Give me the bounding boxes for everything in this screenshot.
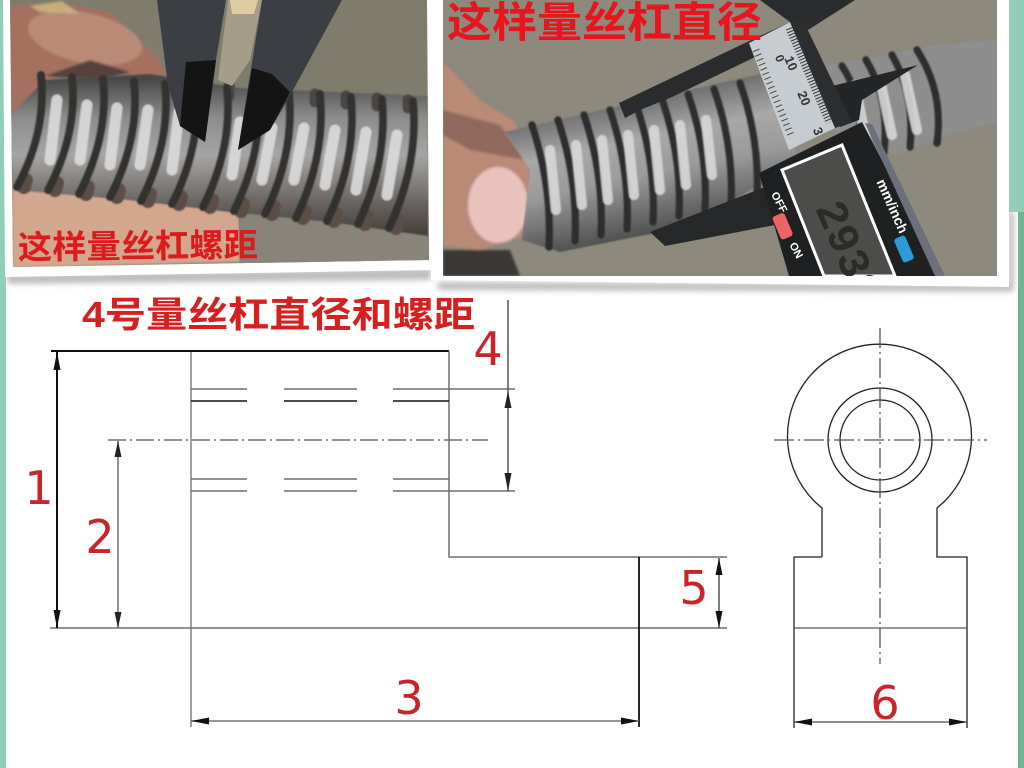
- hand: [443, 62, 530, 276]
- caliper upper jaw: [619, 0, 855, 118]
- heading: 4号量丝杠直径和螺距: [82, 294, 475, 335]
- dimension 4: [473, 300, 512, 491]
- dimension 3: 3: [394, 671, 424, 725]
- dimension 4: 4: [473, 322, 503, 376]
- dimension 5: 5: [679, 561, 709, 615]
- photo frame shadows: [6, 212, 1014, 292]
- photo frame: [3, 0, 436, 277]
- eye outline and body: [788, 344, 972, 728]
- lower thread dashes: [191, 479, 515, 491]
- digital display body: [759, 122, 945, 276]
- white drawing panel: [6, 212, 1018, 768]
- caliper lower jaw: [650, 185, 775, 246]
- inner circle: [840, 400, 920, 480]
- ruler scale: 0: [772, 53, 788, 65]
- top crests: [229, 86, 408, 108]
- dimension 2: [85, 441, 122, 628]
- caliper jaws: [157, 0, 342, 150]
- off button: [772, 213, 792, 240]
- threaded rod: [505, 40, 997, 252]
- digital display body: ON: [786, 240, 805, 261]
- dimension 3: [191, 671, 639, 725]
- dimension 6: 6: [870, 676, 900, 730]
- ruler scale: [749, 18, 852, 150]
- middle circle: [828, 388, 932, 492]
- step outline: [449, 351, 727, 557]
- panel: diameter measuring photo: [431, 0, 1009, 311]
- dimension 1: [24, 352, 60, 628]
- horizontal center line: [774, 439, 987, 441]
- ruler scale: 20: [794, 89, 814, 108]
- left extension line: [190, 352, 192, 727]
- technical drawing: front view: [774, 328, 987, 728]
- caliper inner jaw right: [828, 65, 918, 127]
- outline top: [51, 350, 449, 352]
- photo label: 这样量丝杠螺距: 这样量丝杠螺距: [18, 226, 258, 266]
- lower hand: [12, 185, 240, 268]
- panel: pitch measuring photo: [3, 0, 436, 277]
- right teal edge: [1018, 212, 1024, 768]
- right extension line: [638, 557, 640, 727]
- concrete background: [443, 0, 997, 276]
- photo content: [443, 0, 997, 276]
- photo frame: [431, 0, 1009, 287]
- unit button: [894, 236, 914, 262]
- unit label: mm/inch: [874, 176, 912, 236]
- dimension 6: [794, 676, 967, 730]
- photo content: [10, 0, 430, 270]
- technical drawing: side view: [50, 351, 727, 727]
- ruler scale: 3: [810, 125, 826, 138]
- center line: [108, 439, 488, 441]
- dimension 5: [679, 558, 722, 628]
- upper thread dashes: [191, 389, 515, 401]
- vertical center line: [879, 328, 881, 664]
- display digits: 2932: [802, 194, 889, 311]
- upper fingers: [10, 1, 168, 118]
- base line: [794, 627, 967, 629]
- dimension 1: 1: [24, 461, 54, 515]
- photo label: 这样量丝杠直径: 这样量丝杠直径: [447, 0, 762, 46]
- display screen: [782, 145, 895, 276]
- threaded rod: [10, 74, 428, 236]
- on/off labels: OFF: [768, 190, 789, 215]
- lower right concrete: [238, 214, 429, 264]
- dimension 2: 2: [85, 510, 115, 564]
- ruler scale: 10: [781, 54, 801, 73]
- concrete background: [10, 0, 430, 270]
- base line: [50, 627, 727, 629]
- bottom teeth: [24, 180, 398, 228]
